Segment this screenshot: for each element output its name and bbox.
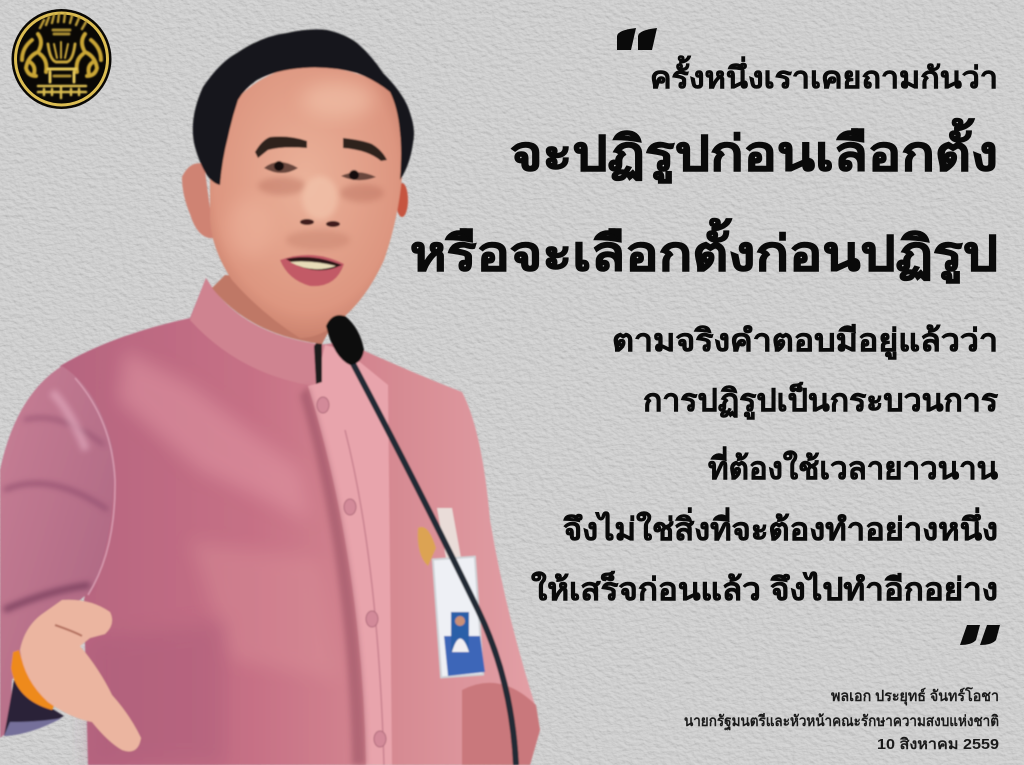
face [210, 66, 402, 338]
speaker title: นายกรัฐมนตรีและหัวหน้าคณะรักษาความสงบแห่งชาติ [684, 712, 999, 731]
quote headline line 3: หรือจะเลือกตั้งก่อนปฏิรูป [410, 218, 998, 284]
arm sleeve [0, 366, 114, 738]
quote line 8: ให้เสร็จก่อนแล้ว จึงไปทำอีกอย่าง [531, 570, 998, 607]
lanyard clip [437, 508, 461, 558]
quote line 1: ครั้งหนึ่งเราเคยถามกันว่า [650, 55, 998, 95]
quote line 4: ตามจริงคำตอบมีอยู่แล้วว่า [612, 323, 998, 360]
eyes [264, 162, 298, 173]
quote text [410, 55, 998, 607]
stand collar [190, 278, 325, 386]
eyebrows [255, 136, 307, 158]
gold pin [418, 527, 436, 566]
speaker name: พลเอก ประยุทธ์ จันทร์โอชา [831, 686, 999, 706]
right sleeve fold [462, 683, 540, 765]
buttons [317, 397, 386, 747]
quote line 5: การปฏิรูปเป็นกระบวนการ [643, 381, 998, 420]
quote headline line 2: จะปฏิรูปก่อนเลือกตั้ง [510, 118, 998, 184]
jacket body [60, 278, 540, 765]
microphone head [326, 315, 364, 365]
right ear [396, 183, 408, 217]
diagonal light band [118, 350, 310, 520]
left ear [182, 163, 214, 238]
attribution [684, 686, 999, 753]
mouth [280, 255, 344, 286]
icon: government seal [12, 9, 112, 109]
neck gap [314, 336, 322, 384]
shirt cuff and wrist shadow [4, 680, 64, 736]
thumb crease [55, 625, 82, 636]
quote line 6: ที่ต้องใช้เวลายาวนาน [708, 446, 998, 486]
orange wristband [11, 650, 56, 710]
date: 10 สิงหาคม 2559 [877, 735, 999, 753]
microphone stem [350, 358, 516, 765]
placket [308, 345, 392, 765]
nostrils [300, 219, 314, 225]
icon: opening quotation mark [617, 28, 657, 50]
facial shading [226, 82, 384, 258]
placket shadow [300, 386, 366, 765]
hair [193, 29, 414, 185]
icon: closing quotation mark [960, 625, 1000, 645]
quote line 7: จึงไม่ใช่สิ่งที่จะต้องทำอย่างหนึ่ง [563, 507, 998, 547]
open hand [20, 600, 141, 752]
figure: speaker in pink suit [0, 29, 540, 765]
id badge [433, 557, 485, 677]
neck [212, 275, 340, 344]
sleeve seam [75, 378, 115, 595]
